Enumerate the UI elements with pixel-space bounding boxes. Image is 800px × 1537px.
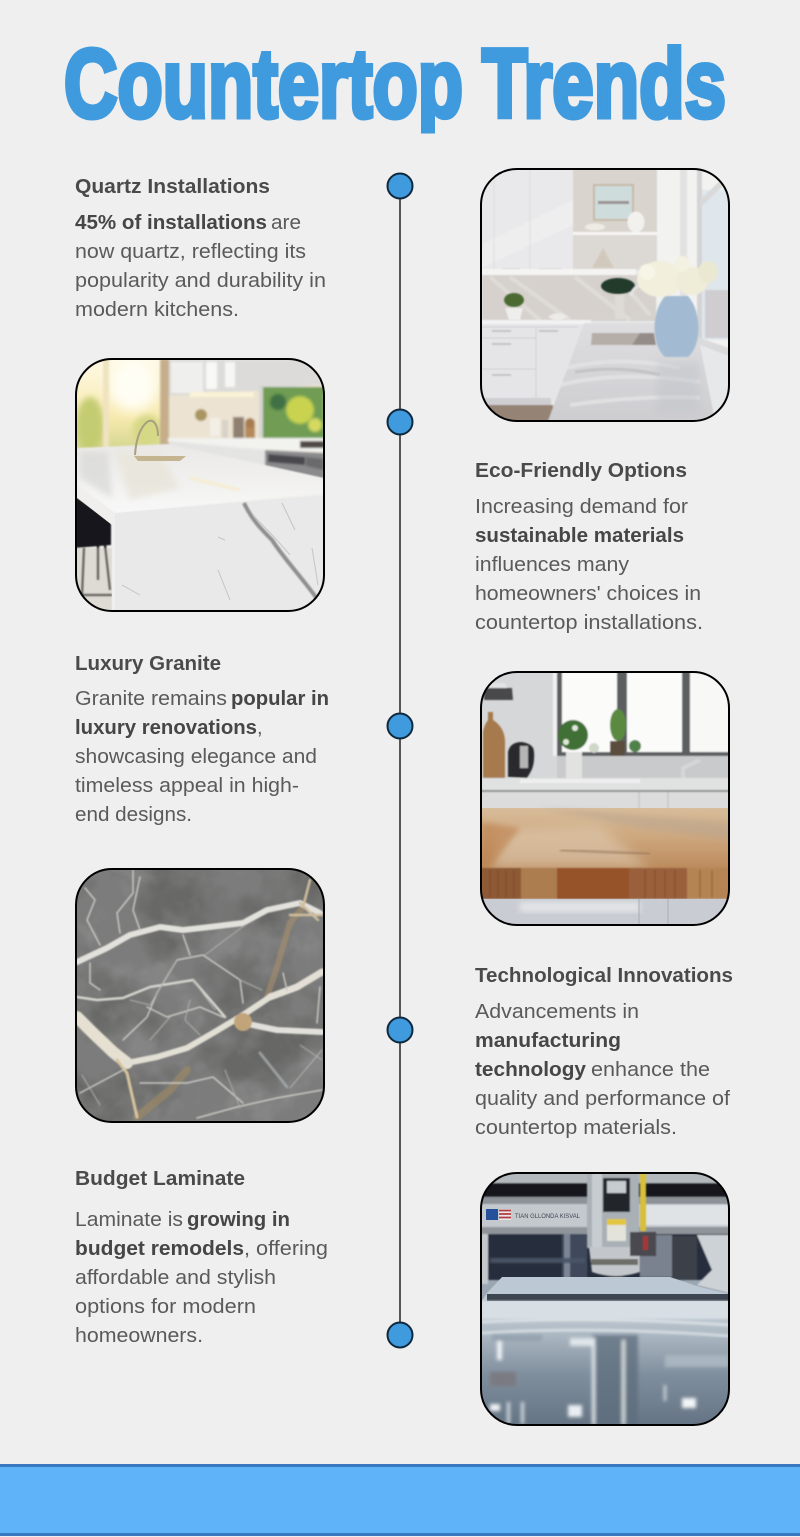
- gantry label: TIAN GLLONDA KISVAL: [515, 1213, 580, 1220]
- body: luxury granite: ,: [257, 717, 263, 739]
- body: budget laminate: affordable and stylish: [75, 1267, 276, 1289]
- flag mark: [486, 1209, 511, 1220]
- machine gantry: [481, 1173, 729, 1293]
- marble waterfall face: [115, 510, 157, 514]
- body: technological innovations: Advancements in: [475, 1001, 639, 1023]
- vase with flowers: [637, 256, 718, 357]
- body: budget laminate: options for modern: [75, 1296, 256, 1318]
- title: Countertop: [64, 29, 463, 138]
- body: eco-friendly: sustainable materials: [475, 525, 684, 547]
- timeline dot 5: [388, 1322, 412, 1348]
- panel: budget laminate text: [75, 1168, 328, 1347]
- panel: quartz installations text: [75, 176, 326, 321]
- stool: [76, 497, 112, 611]
- body: luxury granite: luxury renovations: [75, 717, 257, 739]
- body: luxury granite: Granite remains: [75, 688, 227, 710]
- body: eco-friendly: [475, 496, 703, 634]
- plants: [504, 278, 645, 322]
- photo: marble waterfall island: [76, 359, 324, 611]
- body: eco-friendly: Increasing demand for: [475, 496, 688, 518]
- footer band: [0, 1464, 800, 1536]
- body: technological innovations: technology: [475, 1059, 587, 1081]
- stone surface: [481, 1277, 729, 1425]
- photo: wooden countertop: [481, 672, 729, 925]
- photo: cnc machine cutting stone: [481, 1173, 729, 1425]
- timeline: [388, 174, 412, 1348]
- body: technological innovations: enhance the: [591, 1059, 710, 1081]
- body: budget laminate: budget remodels: [75, 1238, 244, 1260]
- heading: eco-friendly options: Eco-Friendly Options: [475, 460, 687, 482]
- body: eco-friendly: countertop installations.: [475, 612, 703, 634]
- body: budget laminate: , offering: [244, 1238, 328, 1260]
- timeline dot 3: [388, 714, 412, 738]
- body: quartz: are: [271, 212, 301, 234]
- heading: budget laminate: Budget Laminate: [75, 1168, 245, 1190]
- body: budget laminate: homeowners.: [75, 1325, 203, 1347]
- body: technological innovations: quality and performance of: [475, 1088, 730, 1110]
- body: quartz: 45% of installations: [75, 212, 267, 234]
- photo: white kitchen with blue vase: [481, 169, 729, 421]
- heading: luxury granite: Luxury Granite: [75, 653, 221, 675]
- heading: quartz installations: Quartz Installations: [75, 176, 270, 198]
- body: luxury granite: popular in: [231, 688, 329, 710]
- panel: luxury granite text: [75, 653, 329, 826]
- photo: grey granite slab: [76, 869, 324, 1122]
- heading: technological innovations: Technological Innovations: [475, 965, 733, 987]
- timeline dot 2: [388, 410, 412, 434]
- spindle head: [586, 1174, 657, 1277]
- body: budget laminate: growing in: [187, 1209, 290, 1231]
- body: budget laminate: Laminate is: [75, 1209, 183, 1231]
- island top: [76, 444, 324, 513]
- body: quartz: [75, 212, 326, 321]
- body: luxury granite: showcasing elegance and: [75, 746, 317, 768]
- body: quartz: now quartz, reflecting its: [75, 241, 306, 263]
- body: luxury granite: timeless appeal in high-: [75, 775, 299, 797]
- body: technological innovations: [475, 1001, 730, 1139]
- body: quartz: popularity and durability in: [75, 270, 326, 292]
- panel: eco-friendly options text: [475, 460, 703, 634]
- body: technological innovations: manufacturing: [475, 1030, 621, 1052]
- panel: technological innovations text: [475, 965, 733, 1139]
- wood front edge: [481, 868, 729, 899]
- body: budget laminate: [75, 1209, 328, 1347]
- body: technological innovations: countertop materials.: [475, 1117, 677, 1139]
- body: eco-friendly: homeowners' choices in: [475, 583, 701, 605]
- title: [65, 44, 725, 134]
- timeline dot 1: [388, 174, 412, 198]
- body: eco-friendly: influences many: [475, 554, 629, 576]
- body: quartz: modern kitchens.: [75, 299, 239, 321]
- timeline dot 4: [388, 1018, 412, 1042]
- body: luxury granite: [75, 688, 329, 826]
- body: luxury granite: end designs.: [75, 804, 192, 826]
- title: Trends: [482, 29, 726, 138]
